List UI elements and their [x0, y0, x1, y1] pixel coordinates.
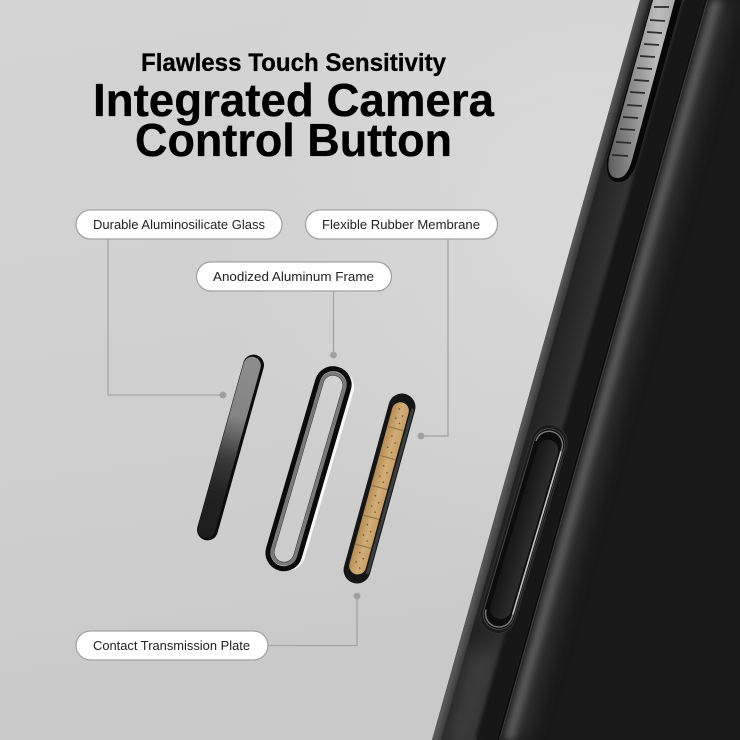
leader line: glass: [108, 239, 226, 398]
phone camera control button: [476, 420, 571, 638]
title line: integrated camera: Integrated Camera: [93, 74, 494, 126]
leader line: plate: [268, 593, 360, 646]
label: Durable Aluminosilicate Glass: [76, 210, 282, 239]
label: Anodized Aluminum Frame: Anodized Aluminum Frame: [213, 269, 374, 284]
title: [93, 49, 494, 166]
label: Durable Aluminosilicate Glass: Durable Aluminosilicate Glass: [93, 217, 265, 232]
leader line: membrane: [418, 239, 448, 439]
phone case: [432, 0, 740, 740]
label: Contact Transmission Plate: Contact Transmission Plate: [93, 638, 250, 653]
part: anodized aluminum frame: [264, 365, 356, 574]
label: Contact Transmission Plate: [76, 631, 268, 660]
part: contact transmission plate: [340, 390, 419, 587]
title line: eyebrow: Flawless Touch Sensitivity: [141, 49, 446, 77]
label: Flexible Rubber Membrane: [306, 210, 498, 239]
part: aluminosilicate glass: [195, 352, 266, 543]
leader line: frame: [330, 291, 337, 358]
label: Flexible Rubber Membrane: Flexible Rubber Membrane: [322, 217, 480, 232]
title line: control button: Control Button: [135, 114, 452, 166]
phone side button rail: [607, 0, 682, 182]
label: Anodized Aluminum Frame: [196, 262, 392, 291]
